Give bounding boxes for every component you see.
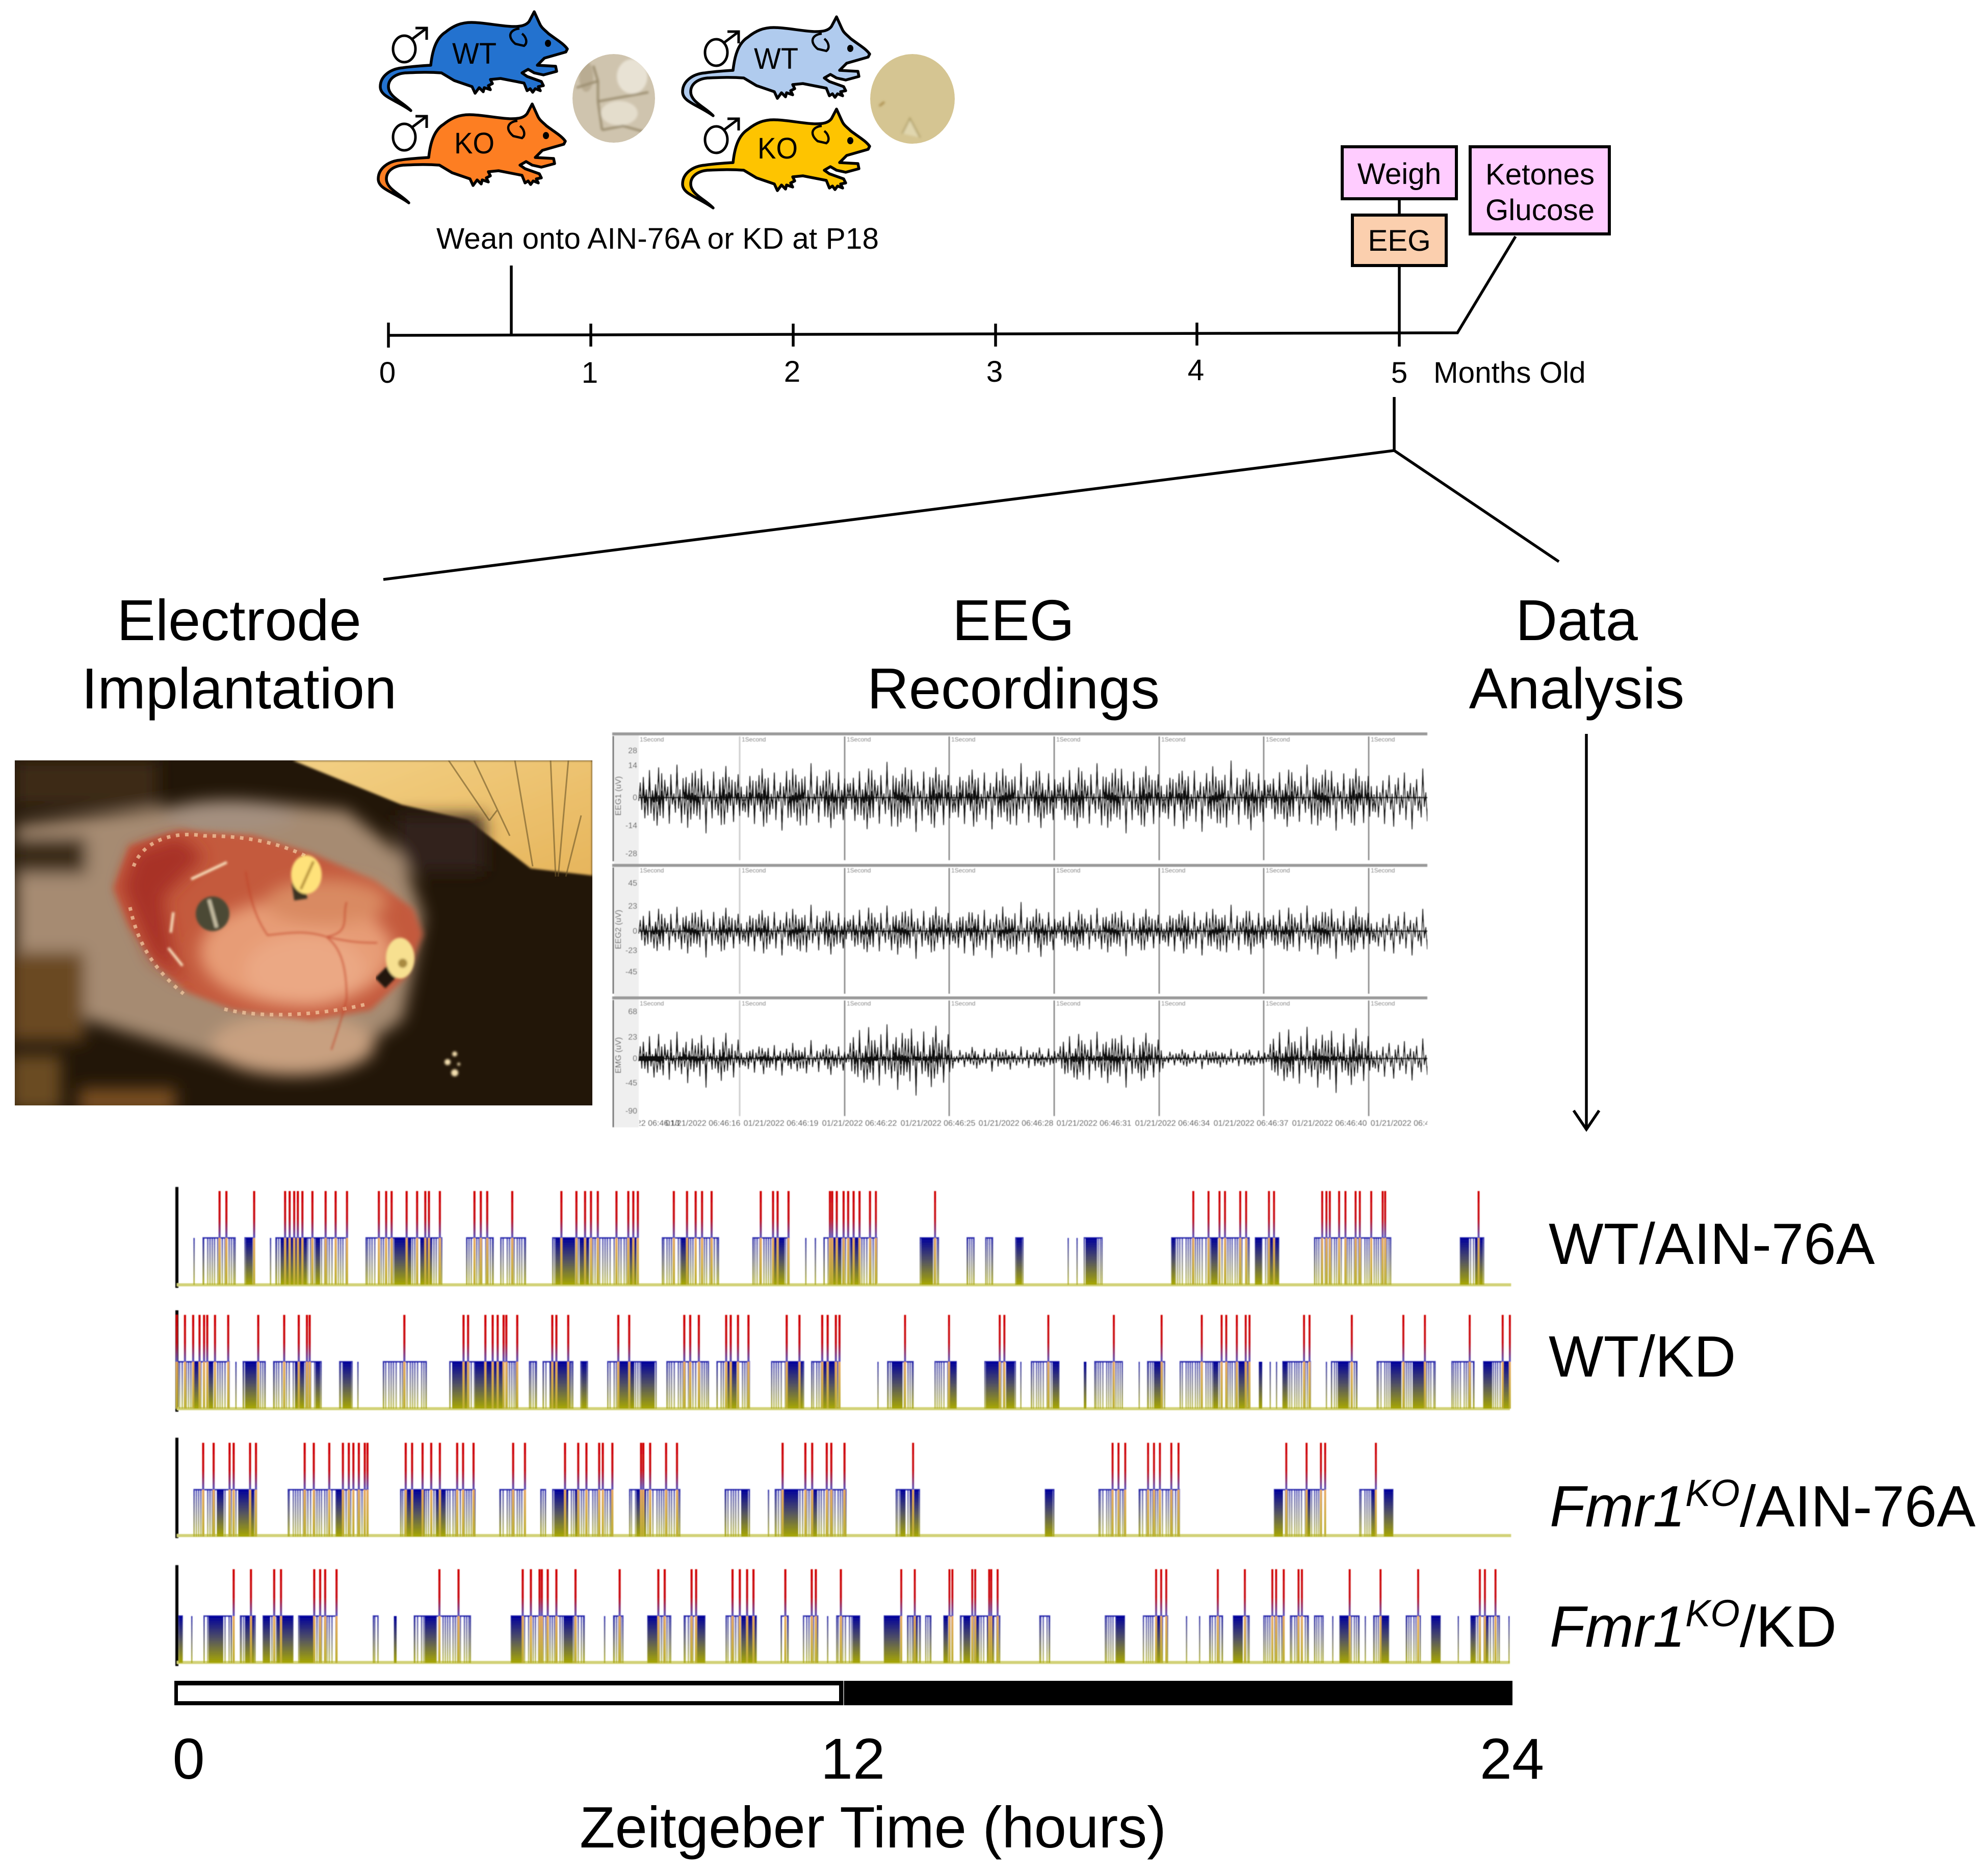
screw: right electrode [382,938,414,981]
heading: EEG Recordings: Recordings [867,656,1160,721]
screw: top electrode [291,855,322,900]
axis numbers: hours: 0 [172,1727,205,1791]
text: tick labels: -45 [625,968,637,976]
text: tick labels: 0 [633,794,637,802]
timeline axis: 0 [379,356,396,389]
text: tick labels: 23 [628,1033,637,1042]
label: WT/AIN-76A: WT/AIN-76A [1549,1212,1875,1277]
icon: KD food pellet [870,54,955,144]
timeline axis: 1 [582,356,598,389]
text: tick labels: 1Second [1161,1000,1185,1007]
text: tick labels: -90 [625,1107,637,1116]
heading: Data Analysis: Data [1516,588,1638,653]
label: Fmr1 KO/KD: KO [1685,1592,1740,1634]
text: tick labels: 1Second [951,736,975,743]
text: tick labels: 1Second [951,1000,975,1007]
text: tick labels: 1Second [1161,736,1185,743]
axis numbers: hours: 12 [821,1727,885,1791]
icon: KO mouse on AIN-76A: KO [454,127,494,160]
text: time stamps [639,1119,1428,1126]
timeline axis [379,236,1586,389]
text: tick labels: 1Second [1266,736,1290,743]
text: time stamps: 01/21/2022 06:46:16 [666,1119,740,1128]
timeline axis: 5 [1391,356,1407,389]
trace: EEG channel 1 [639,760,1478,833]
text: tick labels: 1Second [1266,867,1290,874]
axis title: Zeitgeber Time (hours) [580,1795,1166,1860]
text: tick labels: 1Second [1056,1000,1080,1007]
text: time stamps: 01/21/2022 06:46:40 [1292,1119,1367,1128]
heading: Electrode Implantation: Implantation [82,656,397,721]
screw: left electrode [196,896,229,931]
text: tick labels: 1Second [640,1000,664,1007]
text: tick labels: 23 [628,902,637,911]
text: tick labels: 0 [633,927,637,936]
box: Ketones and Glucose [1470,147,1609,234]
heading: EEG Recordings [867,588,1160,721]
text: time stamps: 01/21/2022 06:46:25 [901,1119,976,1128]
label: WT/KD: WT/KD [1549,1325,1736,1389]
text: tick labels: 28 [628,747,637,755]
chart: EEG recordings [605,732,1478,1128]
text: tick labels: 0 [633,1054,637,1063]
text: tick labels: 45 [628,879,637,888]
text: tick labels: 1Second [847,867,871,874]
text: weaning note: Wean onto AIN-76A or KD at P18 [436,222,879,255]
text: tick labels: 1Second [1371,1000,1395,1007]
heading: EEG Recordings: EEG [952,588,1075,653]
light/dark bar [174,1681,1512,1705]
trace row: WT/AIN-76A [177,1187,1511,1288]
text: tick labels: 1Second [640,867,664,874]
text: tick labels: -28 [625,850,637,858]
text: time stamps: 01/21/2022 06:46:22 [822,1119,897,1128]
text: tick labels: -45 [625,1079,637,1088]
box: EEG [1352,215,1446,266]
text: tick labels: 1Second [951,867,975,874]
text: tick labels: 14 [628,761,637,770]
heading: Electrode Implantation [82,588,397,721]
box: EEG: EEG [1368,224,1431,257]
text: tick labels: 1Second [1371,867,1395,874]
text: tick labels: EEG1 (uV) [614,776,623,815]
trace row: Fmr1 KO/AIN-76A [177,1438,1511,1538]
text: time stamps: 01/21/2022 06:46:43 [1371,1119,1446,1128]
box: Ketones and Glucose: Ketones [1485,158,1595,191]
icon: WT mouse on KD [683,17,870,116]
label: Fmr1 KO/AIN-76A: /AIN-76A [1740,1474,1975,1539]
box: Weigh [1342,147,1456,215]
trace row: Fmr1 KO/KD [177,1565,1510,1666]
trace: EMG channel [639,1024,1478,1096]
box: Weigh: Weigh [1358,157,1441,191]
text: tick labels: 1Second [847,1000,871,1007]
text: time stamps: 01/21/2022 06:46:28 [979,1119,1053,1128]
label: Fmr1 KO/AIN-76A: KO [1685,1472,1740,1514]
icon: KO mouse on KD [683,109,870,208]
icon: KO mouse on AIN-76A [378,104,565,203]
text: tick labels: 1Second [1056,867,1080,874]
text: time stamps: 01/21/2022 06:46:31 [1057,1119,1132,1128]
label: Fmr1 KO/KD: /KD [1740,1595,1837,1659]
text: time stamps: 01/21/2022 06:46:34 [1135,1119,1210,1128]
label: Fmr1 KO/KD: Fmr1 [1550,1595,1685,1659]
heading: Electrode Implantation: Electrode [117,588,361,653]
arrow: data analysis to traces [1574,734,1599,1129]
heading: Data Analysis [1469,588,1684,721]
axis numbers: hours [172,1727,1544,1791]
icon: WT mouse on KD: WT [754,42,798,75]
timeline axis: 4 [1188,354,1204,387]
trace row: WT/KD [177,1310,1510,1412]
icon: WT mouse on AIN-76A: WT [452,37,497,70]
timeline axis: 3 [986,355,1003,388]
text: tick labels: -23 [625,946,637,955]
text: tick labels: 1Second [1161,867,1185,874]
icon: AIN-76A food pellet [572,54,655,143]
text: tick labels [614,736,1395,1116]
text: tick labels: 1Second [1056,736,1080,743]
timeline axis: Months Old [1433,356,1586,389]
text: tick labels: 1Second [742,867,766,874]
icon: KO mouse on KD: KO [758,132,798,165]
label: Fmr1 KO/AIN-76A: Fmr1 [1550,1474,1685,1539]
trace: EEG channel 2 [639,902,1478,959]
waveform traces [639,760,1478,1096]
text: time stamps: 01/21/2022 06:46:37 [1214,1119,1289,1128]
text: tick labels: 1Second [1371,736,1395,743]
photo: electrode implantation [10,760,592,1114]
text: tick labels: -14 [625,822,637,830]
text: tick labels: EMG (uV) [614,1037,623,1073]
icon: WT mouse on AIN-76A [380,12,567,111]
heading: Data Analysis: Analysis [1469,656,1684,721]
box: Ketones and Glucose: Glucose [1485,194,1595,227]
text: tick labels: 68 [628,1008,637,1016]
axis numbers: hours: 24 [1480,1727,1544,1791]
zoom-in expansion lines [383,397,1559,579]
text: tick labels: 1Second [1266,1000,1290,1007]
timeline axis: 2 [784,355,800,388]
text: tick labels: 1Second [847,736,871,743]
text: tick labels: 1Second [742,1000,766,1007]
text: tick labels: 1Second [640,736,664,743]
text: time stamps: 01/21/2022 06:46:19 [744,1119,819,1128]
text: tick labels: 1Second [742,736,766,743]
text: tick labels: EEG2 (uV) [614,910,623,949]
text: time stamps: 01/21/2022 06:46:13 [605,1119,680,1128]
